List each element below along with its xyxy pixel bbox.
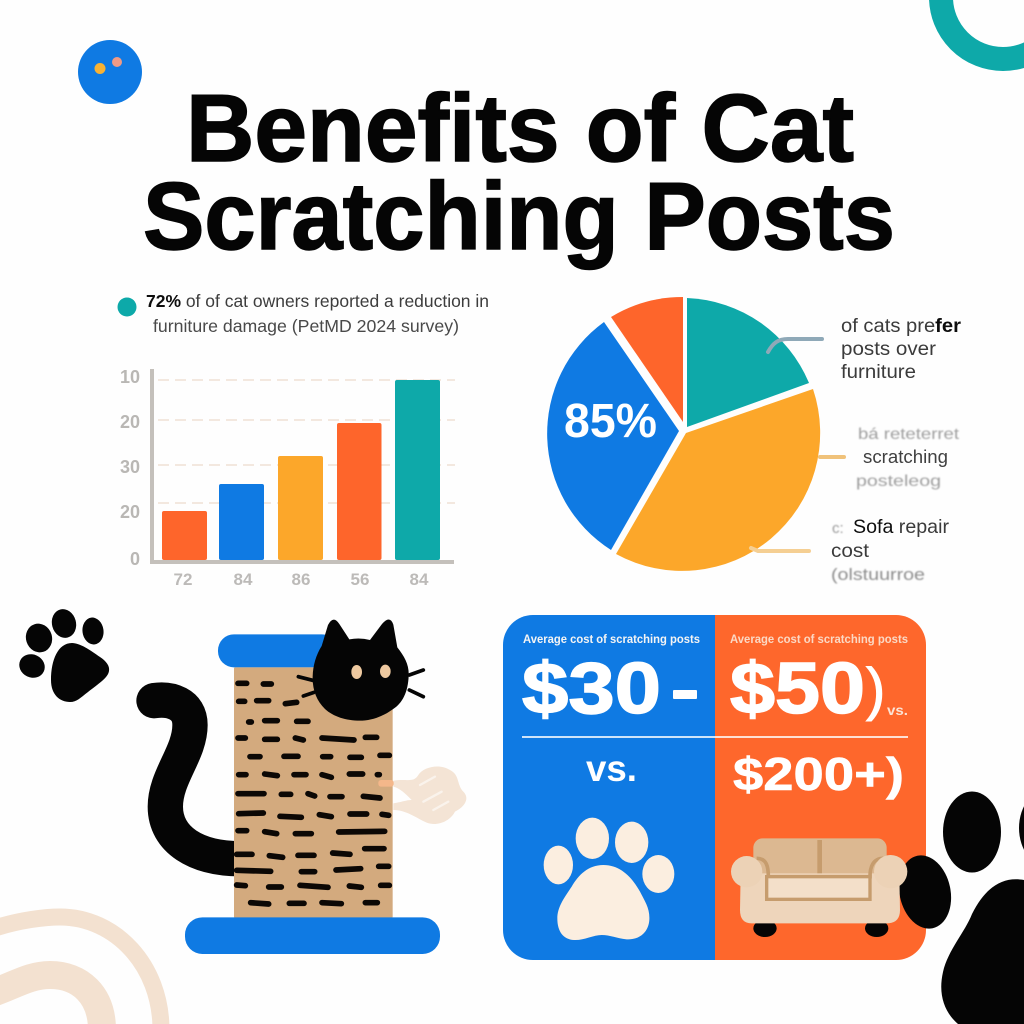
scratching post price column: Average cost of scratching posts bbox=[523, 632, 700, 646]
post top cap bbox=[218, 634, 338, 667]
faded scratch paw bbox=[378, 766, 466, 824]
bar chart: 84 bbox=[410, 570, 429, 589]
bar chart: 20 bbox=[120, 502, 140, 522]
post body bbox=[234, 667, 393, 918]
legend callout: 72% reduction in furniture damage bbox=[118, 291, 489, 336]
decoration: blue circle with dots bbox=[78, 40, 142, 104]
pie label: sofa repair cost: c: bbox=[832, 520, 844, 537]
pie label: scratching bbox=[856, 426, 960, 490]
bar chart: 0 bbox=[130, 549, 140, 569]
legend callout: 72% reduction in furniture damage: furniture damage (PetMD 2024 survey) bbox=[153, 316, 459, 336]
title: Benefits of Cat bbox=[186, 75, 854, 182]
sofa repair price column: $200+) bbox=[733, 748, 904, 800]
scratching post price column: vs. bbox=[586, 748, 637, 789]
pie label: sofa repair cost: Sofa repair bbox=[853, 516, 950, 538]
pie label: sofa repair cost bbox=[831, 516, 950, 584]
pie label: sofa repair cost: cost bbox=[831, 540, 870, 562]
scratching post price column bbox=[522, 632, 700, 789]
bar chart bbox=[120, 367, 455, 589]
panel divider bbox=[522, 736, 908, 738]
pie label: of cats prefer posts over furniture: of cats prefer bbox=[841, 315, 961, 337]
bar chart: 84 bbox=[234, 570, 253, 589]
title: Scratching Posts bbox=[143, 163, 895, 270]
post base bbox=[185, 917, 440, 954]
icon: sofa bbox=[731, 838, 907, 937]
pie label: sofa repair cost: (olstuurroe bbox=[831, 565, 925, 584]
pie value: 85% bbox=[564, 395, 657, 448]
sofa repair price column: ) bbox=[866, 657, 885, 722]
leader lines bbox=[751, 339, 844, 551]
decoration: beige arcs bottom left bbox=[0, 917, 161, 1024]
illustration: cat on scratching post bbox=[154, 619, 466, 954]
pie label: scratching: scratching bbox=[863, 447, 948, 467]
bar chart: 10 bbox=[120, 367, 140, 387]
cat head bbox=[298, 619, 423, 721]
legend callout: 72% reduction in furniture damage: 72% of of cat owners reported a reduction in bbox=[146, 291, 489, 311]
sisal dashes bbox=[237, 683, 389, 904]
icon: small black paw bbox=[15, 606, 109, 702]
bar chart: 20 bbox=[120, 412, 140, 432]
bar chart: 86 bbox=[292, 570, 310, 589]
pie label: of cats prefer posts over furniture: furniture bbox=[841, 361, 916, 383]
panel: cost comparison bbox=[503, 615, 926, 960]
cat tail bbox=[154, 700, 240, 859]
bar chart: 56 bbox=[351, 570, 369, 589]
icon: cream paw bbox=[544, 818, 674, 940]
sofa repair price column: $50 bbox=[730, 649, 865, 729]
pie label: of cats prefer posts over furniture bbox=[841, 315, 961, 383]
title bbox=[143, 75, 895, 270]
decoration: teal ring top right bbox=[941, 0, 1024, 59]
pie label: of cats prefer posts over furniture: posts over bbox=[841, 338, 937, 360]
scratching post price column: $30 bbox=[522, 649, 661, 729]
bar chart: 30 bbox=[120, 457, 140, 477]
pie label: scratching: bá reteterret bbox=[858, 426, 960, 443]
icon: large black paw bbox=[892, 787, 1024, 1024]
sofa repair price column: vs. bbox=[887, 702, 908, 718]
pie label: scratching: posteleog bbox=[856, 473, 941, 490]
bar chart: 72 bbox=[174, 570, 192, 589]
sofa repair price column: Average cost of scratching posts bbox=[730, 632, 908, 646]
pie chart bbox=[547, 297, 820, 571]
sofa repair price column bbox=[730, 632, 908, 800]
